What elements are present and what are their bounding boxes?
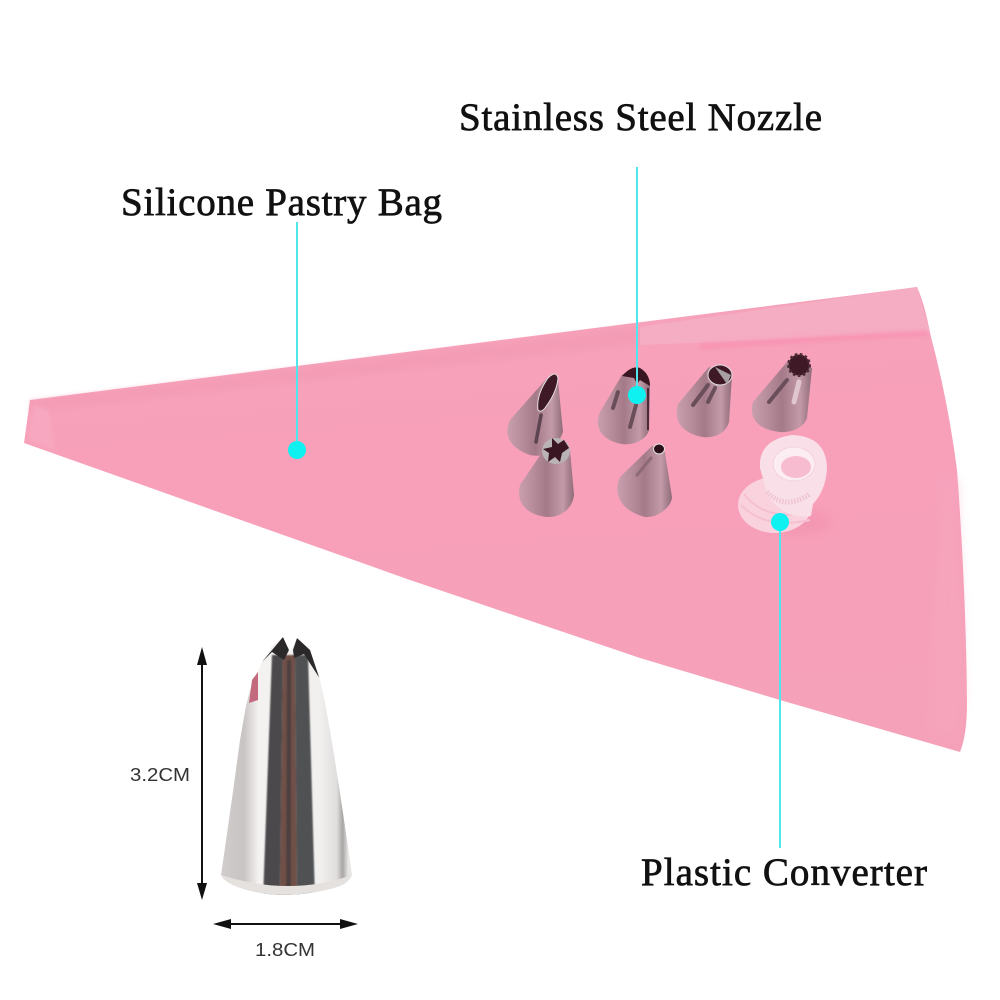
width label: 1.8CM [255,939,315,960]
large nozzle photo [221,637,352,895]
callout line: silicone pastry bag [288,222,306,459]
small nozzle: open leaf [598,367,650,444]
plastic converter [738,435,832,534]
callout line: plastic converter [771,513,789,848]
dimension arrow: width [213,919,358,929]
callout line: stainless steel nozzle [628,167,646,404]
small nozzle: round tip [617,444,672,517]
small nozzle: cross-star opening [519,438,574,517]
dimension arrow: height [197,647,207,900]
height label: 3.2CM [130,764,190,785]
pink silicone pastry bag [24,287,967,752]
heading: stainless steel nozzle: Stainless Steel Nozzle [459,96,822,139]
heading: silicone pastry bag: Silicone Pastry Bag [121,181,442,224]
small nozzle: star opening [752,354,812,432]
small nozzle: triangle opening [677,365,732,437]
heading: plastic converter: Plastic Converter [641,851,927,894]
small nozzle: slanted slit [507,374,563,456]
